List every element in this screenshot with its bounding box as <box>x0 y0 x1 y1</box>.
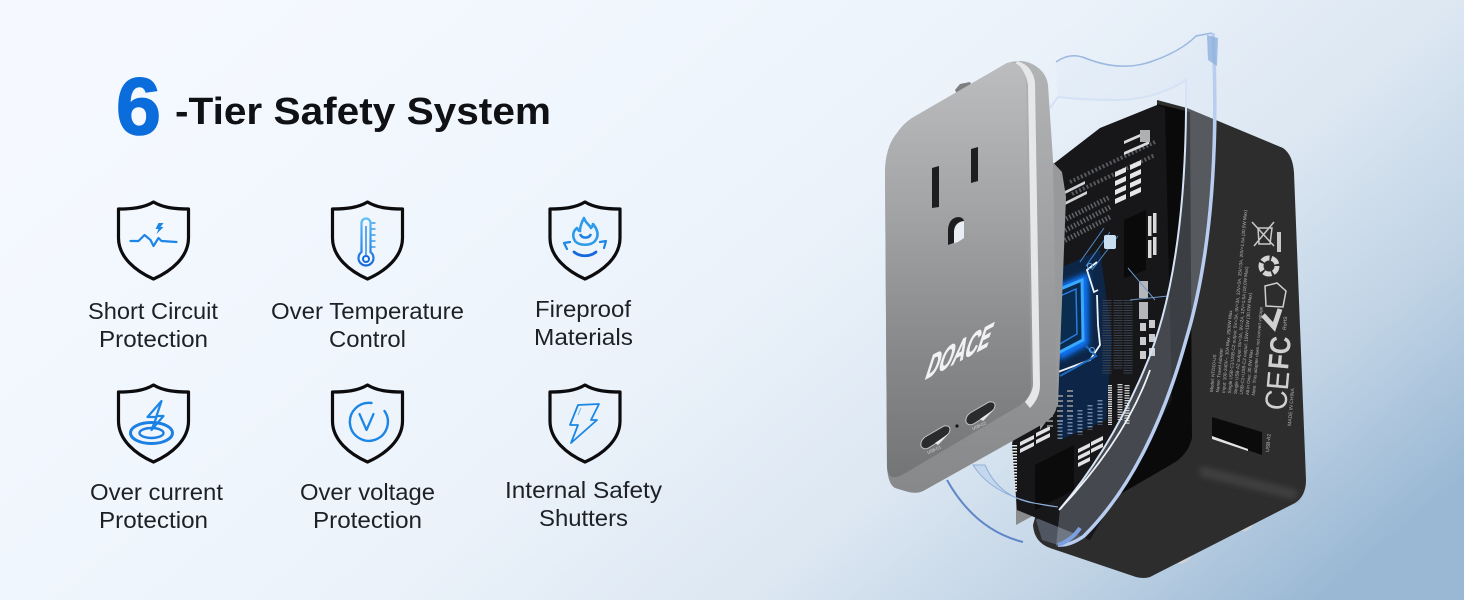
feature: internal safety shutters <box>505 385 663 531</box>
white pads <box>1115 160 1141 204</box>
blue lit zone <box>1056 250 1112 440</box>
title <box>116 62 551 152</box>
outlet left slot <box>932 166 939 208</box>
rohs check mark <box>1263 309 1280 327</box>
feature: over temperature control <box>271 202 464 352</box>
chip blue glow <box>1058 279 1084 356</box>
icon: shield with outlined bolt <box>550 385 620 462</box>
pcb dotted traces <box>1070 142 1155 194</box>
lower pads <box>1020 426 1103 467</box>
spec text lines: USB-C1+USB-C2 output: 15W+15W (30.0W Max) <box>1239 292 1253 395</box>
label second line: Control <box>329 326 406 352</box>
chip dark square <box>1124 210 1146 278</box>
stacked pads <box>1139 281 1148 319</box>
port USB-C2 <box>966 402 995 431</box>
port USB-C2: USB-C2 <box>971 420 988 431</box>
label second line: Protection <box>99 507 208 533</box>
bright traces around chip <box>1058 262 1100 372</box>
lower clear area over base <box>1036 490 1090 545</box>
plug prongs <box>1176 518 1253 564</box>
label second line: Materials <box>534 324 633 350</box>
small bright chip <box>1104 235 1116 249</box>
shield inner edge <box>1050 80 1186 509</box>
label: Over voltage <box>300 479 435 505</box>
comb pins <box>1108 385 1112 425</box>
icon: shield with flame <box>550 202 620 279</box>
spec text lines: Name: Travel Adapter <box>1215 347 1224 393</box>
label second line: Shutters <box>539 505 628 531</box>
brand logo: DOACE <box>921 314 998 388</box>
spec text lines: Input: 100-240V~, 10A Max, 2500W Max <box>1221 309 1233 393</box>
shield top edge tint <box>1207 35 1218 66</box>
feature: fireproof materials <box>534 202 633 350</box>
house symbol <box>1265 283 1286 307</box>
label second line: Protection <box>313 507 422 533</box>
outlet ground hole <box>948 217 964 245</box>
silver faceplate <box>885 61 1066 493</box>
bright line <box>1059 370 1150 510</box>
crossed bin symbol <box>1252 222 1274 246</box>
icon: shield with spark wave <box>118 202 188 279</box>
shield clear band <box>1056 33 1217 546</box>
feature: over voltage protection <box>300 385 435 533</box>
spec text lines <box>1209 208 1272 396</box>
recycle symbol <box>1261 258 1277 274</box>
rohs text: RoHS <box>1282 316 1289 330</box>
label: Over current <box>90 479 224 505</box>
icon: shield with bolt and rings <box>118 385 188 462</box>
outlet right slot <box>971 147 978 183</box>
silver highlight strip <box>1015 61 1040 408</box>
grey insulation flap <box>1016 495 1040 525</box>
port USB-C1 <box>921 426 950 455</box>
spec text lines: Single USB-C1/USB-C2 output: 5V=3A, 9V=3A, 12V=3A, 15V=3A, 20V=1.5A (30.0W Max) <box>1227 209 1248 394</box>
shield lower inner arc <box>973 465 1058 507</box>
spec text lines: All in One: 30.0W Max <box>1245 349 1254 395</box>
ground hole shadow <box>948 217 964 245</box>
black front frame <box>1060 104 1192 518</box>
feature: short circuit protection <box>88 202 219 352</box>
label: Over Temperature <box>271 298 464 324</box>
spec text lines: Single USB-A2 output: 5V=3A, 9V=2A, 12V=1.5A (18.0W Max) <box>1233 266 1249 394</box>
bar symbol <box>1277 232 1281 252</box>
icon: shield with thermometer <box>332 202 402 279</box>
USB-A tongue <box>1212 436 1248 451</box>
shield outer blue edge <box>1058 33 1215 545</box>
heading text: -Tier Safety System <box>175 91 551 133</box>
indicator dot <box>955 424 959 428</box>
shield top outline <box>1056 33 1212 66</box>
circuit board <box>1012 105 1172 540</box>
spec text lines: Model: NTD10-US <box>1209 354 1217 392</box>
rim and side <box>885 61 1057 493</box>
product illustration: exploded power adapter <box>885 33 1306 578</box>
label: Internal Safety <box>505 477 663 503</box>
icon: shield with V dial <box>332 385 402 462</box>
front plate <box>885 63 1031 477</box>
side tab <box>1040 157 1066 430</box>
label: Fireproof <box>535 296 632 322</box>
feature: over current protection <box>90 385 224 533</box>
top nub <box>955 82 973 96</box>
body side print <box>1209 208 1298 455</box>
spec text lines: Note: This adapter does not convert voltage <box>1251 306 1264 396</box>
port USB-C1: USB-C1 <box>926 444 943 455</box>
USB-A port <box>1212 417 1262 455</box>
compliance mark FC: FC <box>1263 335 1298 371</box>
big blue numeral: 6 <box>116 62 161 152</box>
USB-A label: USB-A2 <box>1265 433 1273 452</box>
label: Short Circuit <box>88 298 219 324</box>
transparent shield <box>947 33 1218 546</box>
compliance mark CE: CE <box>1258 370 1296 412</box>
shield lower left arc <box>947 480 1023 542</box>
bottom ridge highlight <box>1200 466 1297 500</box>
made in china: MADE IN CHINA <box>1287 387 1296 426</box>
label second line: Protection <box>99 326 208 352</box>
shield base blue tint <box>1058 528 1080 545</box>
black adapter body <box>1033 100 1306 578</box>
